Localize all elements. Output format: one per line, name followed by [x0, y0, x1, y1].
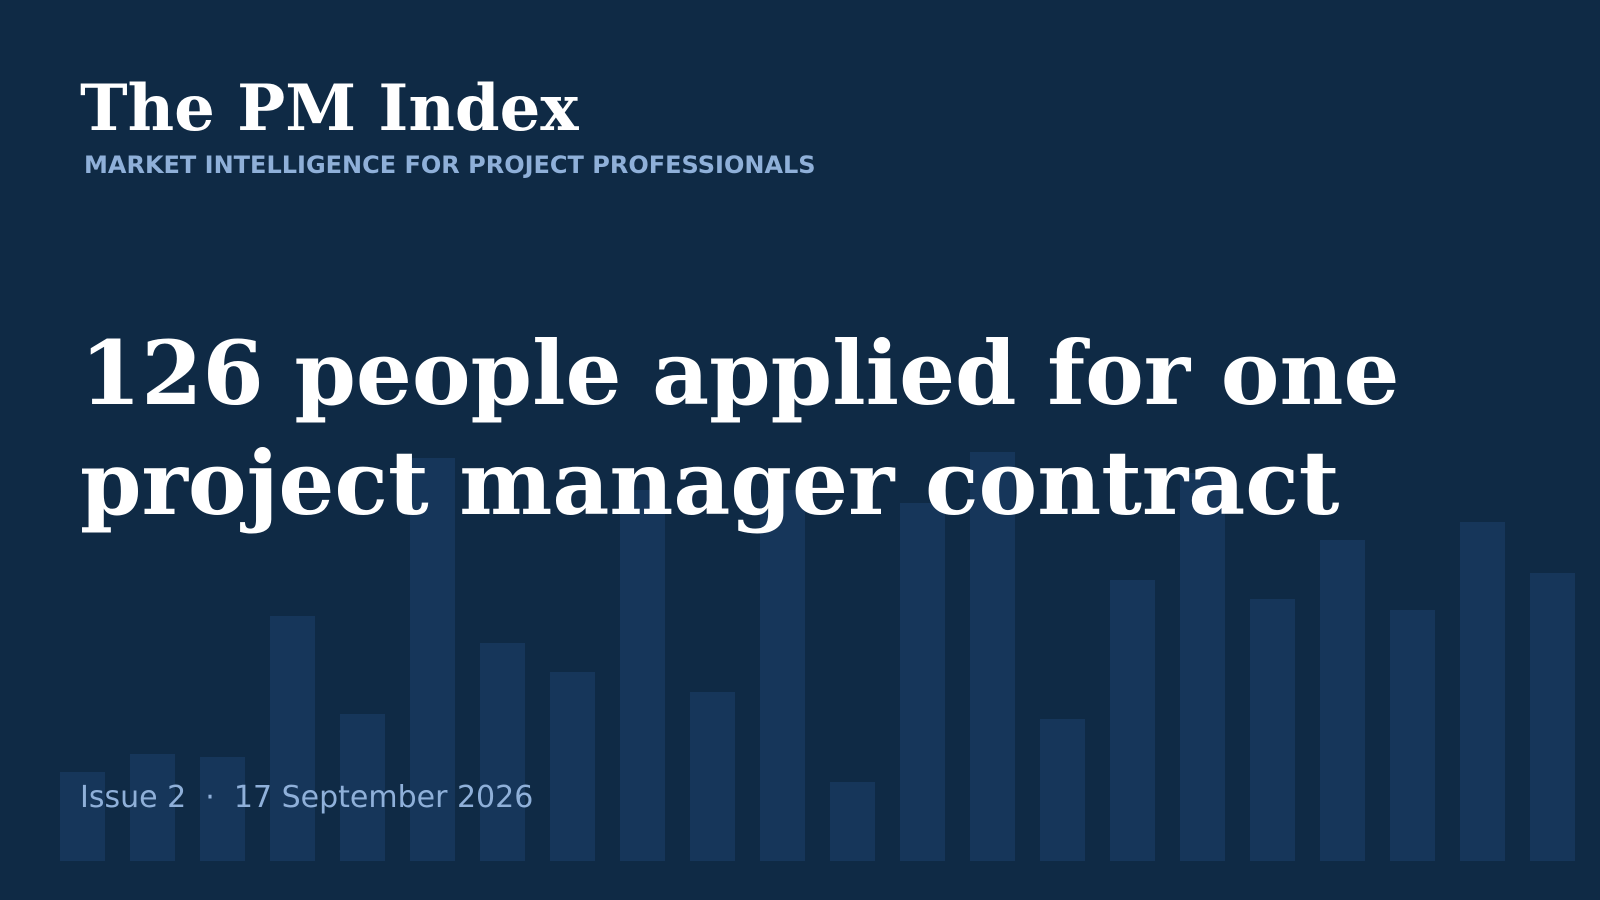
main headline: project manager contract [80, 431, 1339, 535]
issue and date: Issue 2 · 17 September 2026 [80, 780, 533, 815]
main headline [80, 321, 1399, 535]
publication title: The PM Index [80, 71, 578, 146]
tagline: MARKET INTELLIGENCE FOR PROJECT PROFESSIONALS [84, 151, 816, 179]
main headline: 126 people applied for one [80, 321, 1399, 425]
